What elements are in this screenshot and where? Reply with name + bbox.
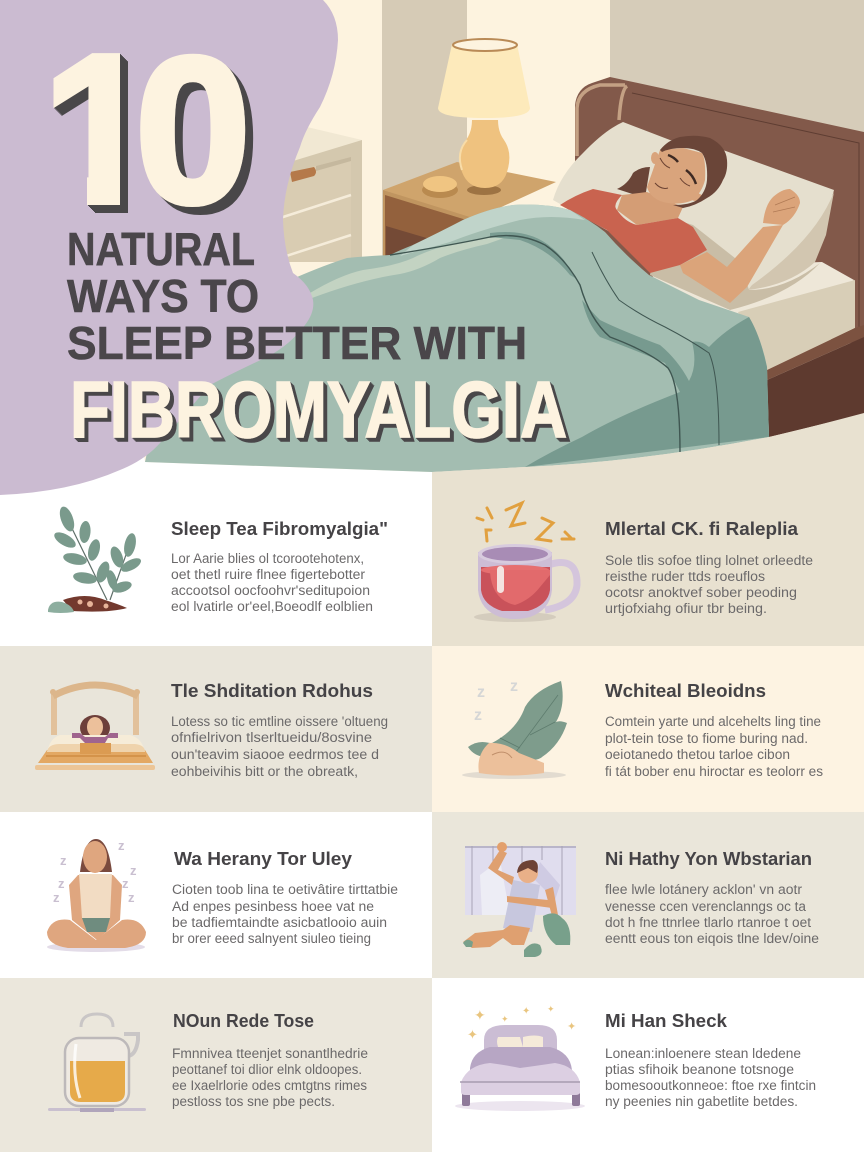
- hand: [763, 189, 800, 225]
- icon: honey jar: [48, 1014, 146, 1112]
- icon: floating z letters: z: [128, 890, 135, 905]
- body text: eentt eous ton eiqois tlne ldev/oine: [605, 931, 819, 946]
- icon: floating z letters: z: [58, 876, 65, 891]
- wall: [120, 0, 864, 472]
- icon: leaf and sleeping figure: z: [510, 678, 518, 695]
- panel: card 2: [35, 681, 388, 779]
- body text: Comtein yarte und alcehelts ling tine: [605, 714, 821, 729]
- icon: floating z letters: [53, 838, 137, 905]
- body text: [605, 1046, 816, 1109]
- heading: Tle Shditation Rdohus: [171, 681, 373, 701]
- body text: be tadfiemtaindte asicbatlooio auin: [172, 915, 387, 930]
- panel: card 5: [474, 503, 813, 622]
- icon: sparkles: ✦: [501, 1014, 509, 1024]
- body text: flee lwle lotánery acklon' vn aotr: [605, 882, 803, 897]
- icon: stretching figure with curtains: [463, 842, 576, 957]
- nightstand: [383, 162, 556, 262]
- body text: [171, 551, 373, 614]
- title number 10: 0: [135, 15, 251, 247]
- title number 10: 1: [42, 10, 160, 247]
- heading: Wchiteal Bleoidns: [605, 681, 766, 701]
- icon: leaf and sleeping figure: [462, 678, 567, 779]
- body text: [172, 882, 398, 946]
- icon: sparkles: ✦: [467, 1027, 478, 1042]
- icon: sparkles: ✦: [567, 1021, 576, 1033]
- panel: card 1: [48, 505, 388, 614]
- heading: Wa Herany Tor Uley: [174, 849, 352, 869]
- body text: venesse ccen verenclanngs oc ta: [605, 899, 806, 914]
- panel: card 7: [463, 842, 819, 957]
- body text: oun'teavim siaooe eedrmos tee d: [171, 747, 379, 762]
- body text: Lonean:inloenere stean ldedene: [605, 1046, 801, 1061]
- title keyword: FIBROMYALGIA: [70, 365, 567, 454]
- heading: Sleep Tea Fibromyalgia": [171, 519, 388, 539]
- body text: [605, 882, 819, 946]
- subtitle lines: [67, 223, 527, 369]
- body text: Cioten toob lina te oetivâtire tirttatbie: [172, 882, 398, 897]
- heading: Mi Han Sheck: [605, 1011, 728, 1031]
- sleeping woman: [560, 136, 800, 303]
- icon: leaf and sleeping figure: z: [477, 684, 485, 701]
- title number 10: [54, 53, 254, 215]
- panel: card 6: [462, 678, 823, 779]
- body text: [171, 714, 388, 779]
- body text: Fmnnivea tteenjet sonantlhedrie: [172, 1046, 368, 1061]
- body text: Sole tlis sofoe tling lolnet orleedte: [605, 553, 813, 568]
- subtitle lines: WAYS TO: [67, 270, 259, 322]
- trinket dish: [422, 176, 458, 198]
- subtitle lines: NATURAL: [67, 223, 255, 275]
- icon: meditating woman: [47, 839, 146, 952]
- icon: woman in bed: [35, 685, 155, 770]
- lavender title blob: [0, 0, 338, 495]
- body text: accootsol oocfoohvr'seditupoion: [171, 583, 370, 598]
- icon: floating z letters: z: [118, 838, 125, 853]
- icon: lavender bed with sparkles: [455, 1025, 585, 1111]
- body text: ptias sfihoik beanone totsnoge: [605, 1062, 794, 1077]
- arm: [680, 225, 783, 303]
- icon: sparkles: ✦: [547, 1004, 555, 1014]
- body text: reisthe ruder ttds roeuflos: [605, 569, 765, 584]
- icon: sparkles: ✦: [474, 1007, 486, 1023]
- panel: card 8: [455, 1004, 816, 1111]
- icon: sparkles: [467, 1004, 576, 1042]
- title: [54, 53, 570, 443]
- hair: [660, 136, 727, 208]
- blanket: [145, 205, 769, 472]
- body text: ofnfielrivon tlserltueidu/8osvine: [171, 730, 372, 745]
- body text: plot-tein tose to fiome buring nad.: [605, 731, 808, 746]
- icon: tea cup: [474, 544, 577, 622]
- body text: [605, 714, 823, 779]
- icon: floating z letters: z: [53, 890, 60, 905]
- body text: ee Ixaelrlorie odes cmtgtns rimes: [172, 1078, 367, 1093]
- body text: Ad enpes pesinbess hoee vat ne: [172, 899, 374, 914]
- icon: floating z letters: z: [122, 876, 129, 891]
- icon: sparkles: ✦: [522, 1006, 530, 1017]
- body text: oet thetl ruire flnee figertebotter: [171, 567, 366, 582]
- body text: eol lvatirle or'eel,Boeodlf eolblien: [171, 599, 373, 614]
- body text: Lor Aarie blies ol tcorootehotenx,: [171, 551, 364, 566]
- subtitle lines: SLEEP BETTER WITH: [67, 317, 527, 369]
- body text: eohbeivihis bitt or the obreatk,: [171, 764, 358, 779]
- lamp: [438, 39, 530, 195]
- icon: floating z letters: z: [60, 853, 67, 868]
- pillow: [553, 122, 834, 310]
- hero bottom curve: [432, 413, 864, 480]
- body text: ny peenies nin gabetlite betdes.: [605, 1094, 798, 1109]
- face: [647, 148, 705, 204]
- dresser: [280, 127, 362, 262]
- icon: orange sleep marks: [477, 503, 574, 541]
- body text: ocotsr anoktvef sober peoding: [605, 585, 797, 600]
- neck and chest: [617, 192, 683, 225]
- body text: oeiotanedo thetou tarloe cibon: [605, 747, 790, 762]
- mattress: [650, 262, 864, 437]
- heading: NOun Rede Tose: [173, 1011, 314, 1031]
- headboard: [575, 77, 864, 345]
- icon: herb plant: [48, 505, 143, 613]
- body text: br orer eeed salnyent siuleo tieing: [172, 931, 371, 946]
- body text: bomesooutkonneoe: ftoe rxe fintcin: [605, 1078, 816, 1093]
- body text: fi tát bober enu hiroctar es teolorr es: [605, 764, 823, 779]
- hair bun: [617, 167, 650, 198]
- body text: urtjofxiahg ofiur tbr being.: [605, 601, 767, 616]
- body text: dot h fne ttnrlee tlarlo rtanroe t oet: [605, 915, 811, 930]
- body text: [172, 1046, 368, 1109]
- heading: Mlertal CK. fi Raleplia: [605, 519, 799, 539]
- panel: card 4: [48, 1011, 368, 1112]
- icon: leaf and sleeping figure: z: [474, 707, 482, 724]
- icon: floating z letters: z: [130, 863, 137, 878]
- body text: Lotess so tic emtline oissere 'oltueng: [171, 714, 388, 729]
- shirt: [560, 189, 707, 273]
- panel: card 3: [47, 838, 398, 952]
- heading: Ni Hathy Yon Wbstarian: [605, 849, 812, 869]
- body text: pestloss tos sne pbe pects.: [172, 1094, 335, 1109]
- hero bedroom illustration: [120, 0, 864, 472]
- body text: [605, 553, 813, 616]
- body text: peottanef toi dlior elnk oldoopes.: [172, 1062, 362, 1077]
